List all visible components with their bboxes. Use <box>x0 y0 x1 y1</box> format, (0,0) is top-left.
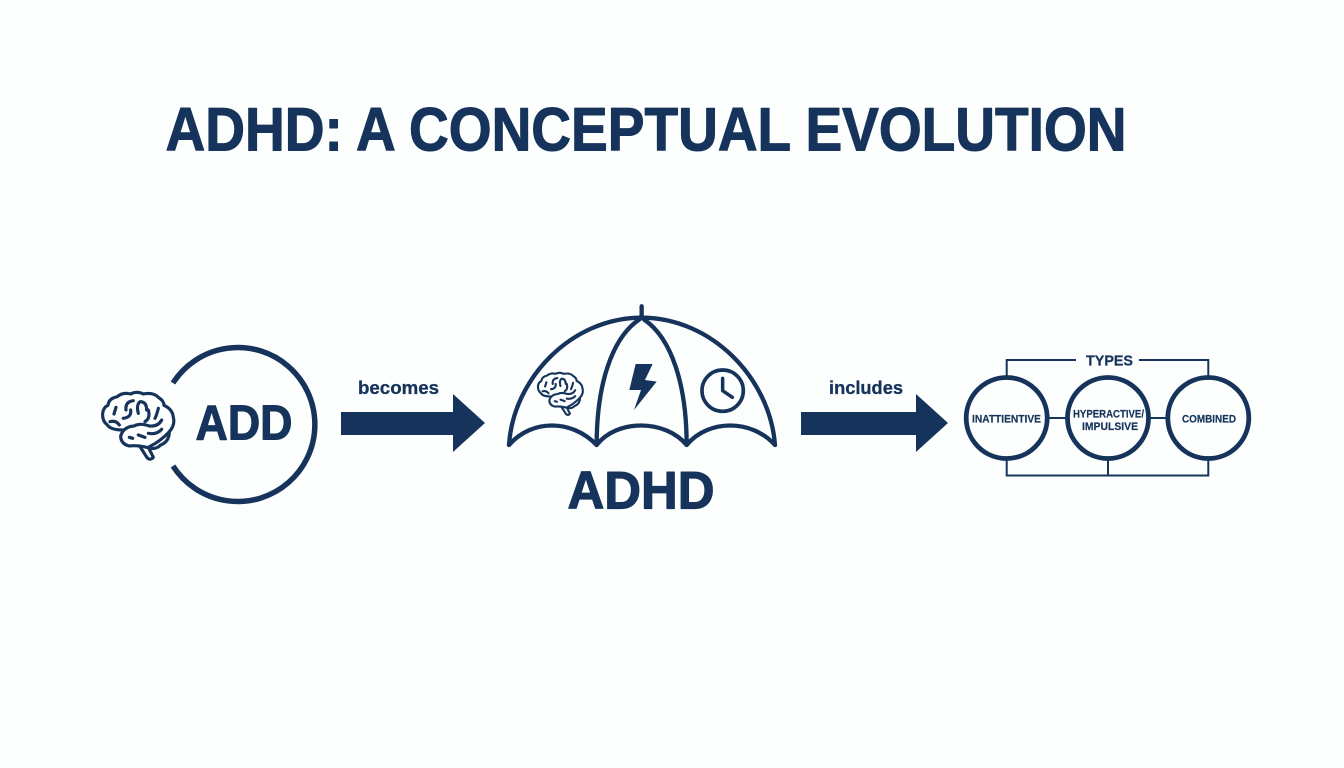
title: ADHD: A CONCEPTUAL EVOLUTION <box>166 96 1126 164</box>
ADHD label: ADHD <box>568 462 714 520</box>
type: hyperactive/impulsive: HYPERACTIVE/ <box>1073 409 1144 421</box>
bracket connectors <box>1007 360 1208 476</box>
type: inattentive <box>966 378 1047 458</box>
panel: ADD <box>103 348 315 502</box>
panel: types <box>966 354 1249 476</box>
icon: small brain <box>538 373 583 415</box>
icon: brain <box>103 392 174 459</box>
icon: clock <box>702 370 743 411</box>
label: TYPES: TYPES <box>1086 354 1133 370</box>
type: combined: COMBINED <box>1182 413 1236 425</box>
arrow shape <box>801 394 948 452</box>
label: becomes: becomes <box>358 377 439 398</box>
panel: ADHD umbrella <box>509 306 775 520</box>
icon: lightning bolt <box>629 364 657 410</box>
icon: umbrella <box>509 306 775 445</box>
type: hyperactive/impulsive: IMPULSIVE <box>1082 421 1138 433</box>
arrow: becomes <box>341 377 485 452</box>
arrow shape <box>341 394 485 452</box>
type: hyperactive/impulsive <box>1068 378 1148 458</box>
label: includes: includes <box>829 377 903 398</box>
ADD label: ADD <box>196 396 292 450</box>
arrow: includes <box>801 377 948 452</box>
type: combined <box>1168 378 1249 458</box>
open circle around ADD <box>173 348 315 502</box>
type: inattentive: INATTIENTIVE <box>972 413 1041 425</box>
